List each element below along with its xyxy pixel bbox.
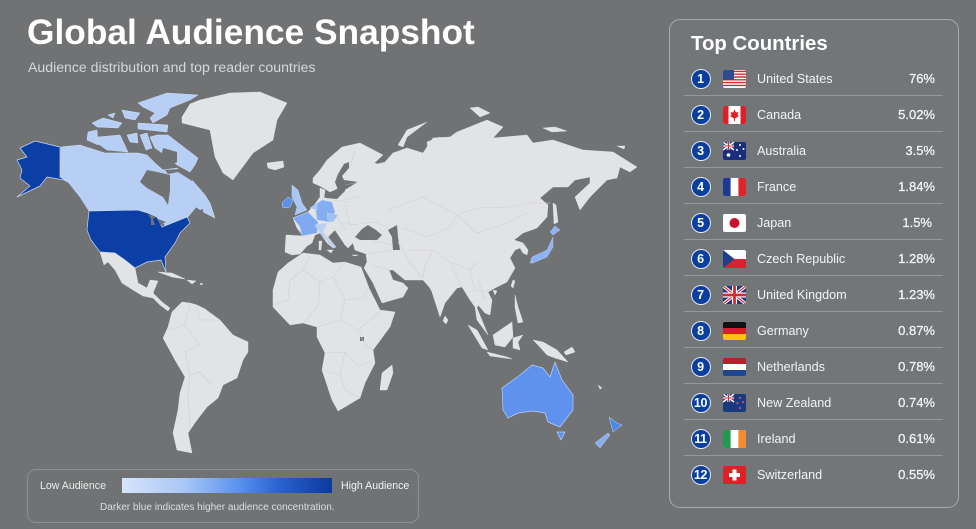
row 5 Japan [684,213,943,240]
Madagascar [380,365,393,390]
row 8 Germany [684,321,943,348]
panel heading: Top Countries [691,33,828,55]
Europe highlighted [282,185,338,248]
Mexico and Central America [100,252,170,311]
Lake Victoria [360,337,364,341]
row 3 Australia: 3 [697,144,704,158]
United Kingdom [292,185,307,215]
row 11 Ireland [684,429,943,456]
Baltic Sea [326,162,358,199]
row 9 Netherlands: Netherlands [757,360,825,374]
inland seas [326,155,400,341]
row 5 Japan: 5 [697,216,704,230]
world map [16,92,637,454]
Caspian Sea [388,225,400,250]
New Zealand [595,417,622,448]
row 12 Switzerland: 0.55% [898,467,935,482]
Africa [273,253,395,411]
row 7 United Kingdom [684,285,943,312]
row 3 Australia: 3.5% [905,143,935,158]
Eurasia [285,120,637,335]
row 6 Czech Republic: 6 [697,252,704,266]
legend high label: High Audience [341,480,409,492]
Southeast Asia islands [443,280,602,389]
title: Global Audience Snapshot [27,13,475,52]
Japan [530,226,560,263]
row 6 Czech Republic: 1.28% [898,251,935,266]
row 12 Switzerland [691,465,935,485]
legend [27,469,419,523]
Scandinavia [313,143,383,192]
row 7 United Kingdom: 1.23% [898,287,935,302]
country borders [170,150,550,430]
row 11 Ireland: 0.61% [898,431,935,446]
Great Lakes [148,214,166,225]
row 1 United States: 1 [697,72,704,86]
row 2 Canada: 2 [697,108,704,122]
row 5 Japan: 1.5% [902,215,932,230]
Iceland [267,161,284,170]
row 2 Canada [684,105,943,132]
Mediterranean islands [319,241,358,256]
Greenland [182,92,287,180]
Cuba and Caribbean [158,272,203,285]
row 7 United Kingdom: United Kingdom [757,288,847,302]
row 10 New Zealand [684,393,943,420]
row 11 Ireland: Ireland [757,432,796,446]
row 9 Netherlands: 9 [697,360,704,374]
row 6 Czech Republic [684,249,943,276]
row 1 United States: 76% [909,71,935,86]
legend gradient bar [122,478,332,493]
legend low label: Low Audience [40,480,106,492]
row 9 Netherlands: 0.78% [898,359,935,374]
Sakhalin [553,203,558,224]
row 12 Switzerland: Switzerland [757,468,822,482]
panel: top countries [669,19,959,508]
row 8 Germany: 8 [697,324,704,338]
row 1 United States [684,69,943,96]
row 10 New Zealand: New Zealand [757,396,831,410]
row 10 New Zealand: 0.74% [898,395,935,410]
row 7 United Kingdom: 7 [697,288,704,302]
row 9 Netherlands [684,357,943,384]
row 4 France: France [757,180,796,194]
France [293,212,318,236]
Australia [502,362,573,440]
row 3 Australia [684,141,943,168]
Switzerland and Italy [315,223,336,248]
Czech Republic [327,213,338,222]
Netherlands [310,203,317,210]
row 12 Switzerland: 12 [694,468,707,482]
Foxe Basin [160,148,203,217]
row 2 Canada: 5.02% [898,107,935,122]
row 8 Germany: Germany [757,324,809,338]
row 2 Canada: Canada [757,108,801,122]
row 11 Ireland: 11 [694,432,707,446]
Hudson Bay [140,170,170,205]
Arctic islands [427,107,625,155]
row 4 France: 1.84% [898,179,935,194]
Novaya Zemlya [398,122,427,147]
legend note: Darker blue indicates higher audience concentration. [100,502,335,513]
subtitle: Audience distribution and top reader countries [28,59,316,75]
Black Sea [355,225,382,240]
Germany [315,200,335,222]
White Sea [376,155,385,164]
row 5 Japan: Japan [757,216,791,230]
South America [163,302,248,453]
USA and Alaska [17,141,190,272]
row 8 Germany: 0.87% [898,323,935,338]
Canada [60,93,215,227]
row 3 Australia: Australia [757,144,806,158]
row 1 United States: United States [757,72,833,86]
land: rest of the world [100,92,637,453]
Ireland [282,197,293,208]
row 4 France [684,177,943,204]
row 6 Czech Republic: Czech Republic [757,252,845,266]
row 4 France: 4 [697,180,704,194]
row 10 New Zealand: 10 [694,396,707,410]
